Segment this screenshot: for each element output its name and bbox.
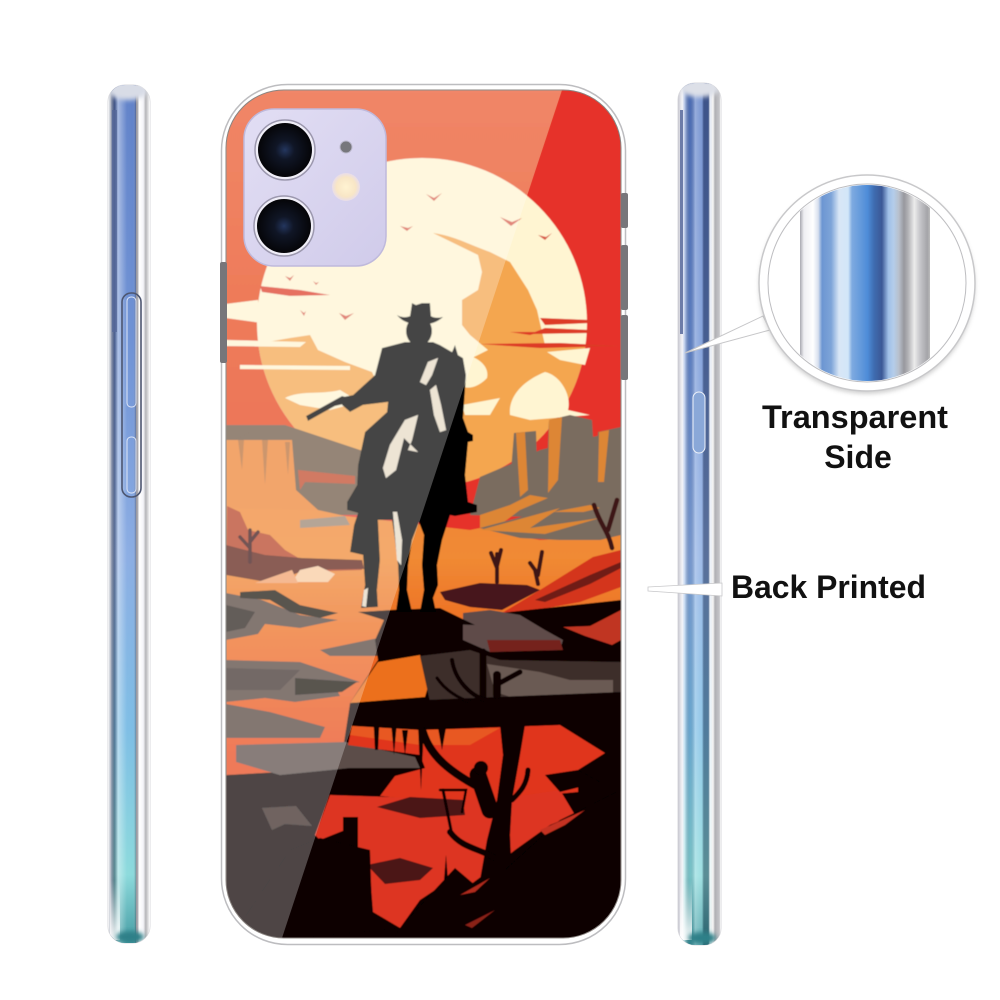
callout pointer wedge [685,316,770,353]
left red rocks [226,506,362,572]
distant haze ridge [226,424,362,516]
right red rock [502,550,621,613]
left side view of phone case [108,80,150,943]
ground shadow at hooves [358,608,475,625]
microphone [340,141,352,153]
printed artwork: desert cowboy [226,90,621,945]
small birds [285,193,552,320]
dark water reflections [377,797,465,818]
label: Transparent Side: Side [824,439,892,475]
magnifier ring [759,175,975,391]
lower lens [254,196,314,256]
sun [257,158,587,488]
sun cream clouds [226,300,590,420]
small mesa red stripe [298,470,355,490]
dark mound with cacti [440,583,540,610]
grey fragment inside dark area [262,806,312,830]
infographic canvas [108,82,977,946]
diagonal glass glare [226,90,562,938]
camera module [244,109,386,266]
reflected orange glow [350,655,430,703]
label: Transparent Side: Transparent [762,399,948,435]
coat and horse highlights [362,358,446,607]
rider hat [397,303,443,325]
desert ground [226,509,620,776]
right ridge jagged base [480,512,621,540]
pale horizon under left mesa [300,516,350,528]
right lower red rock [563,610,621,645]
red cloud streaks [260,286,621,348]
black foreground mass [226,600,621,945]
hanging drips [373,712,448,880]
rocky foreground [396,792,616,936]
red water upper [348,725,605,800]
upper reflected branches [437,652,520,705]
black water ledge [350,692,621,730]
left dark streak bands [226,593,378,738]
back printed pointer [648,583,722,596]
power button on right side [693,392,705,453]
brown band [463,610,563,652]
left side volume buttons [122,293,141,497]
side buttons seen through case [220,193,628,380]
label: Back Printed: Back Printed [731,569,926,605]
magnifier callout: transparent side [685,175,975,394]
right side view of phone case [678,79,721,945]
red water lower [315,790,575,928]
magnified stripes [800,185,930,381]
main phone case back [220,84,628,945]
upper lens [255,120,315,180]
print border highlight [226,90,621,938]
lower-left haze streak [236,742,420,775]
clear case frame [222,84,626,944]
sun orange clouds [250,233,590,490]
right mesas [511,414,620,464]
dead tree silhouette [480,725,525,880]
building silhouette [342,816,358,848]
rider and horse silhouette [306,303,477,612]
revolver [306,396,350,421]
flash [332,173,360,201]
red sky [341,90,620,541]
horse and coat [342,342,477,612]
reflected grey band [420,650,621,702]
rider head [406,316,432,346]
label: Transparent Side [762,399,948,475]
left mesa [226,440,318,515]
